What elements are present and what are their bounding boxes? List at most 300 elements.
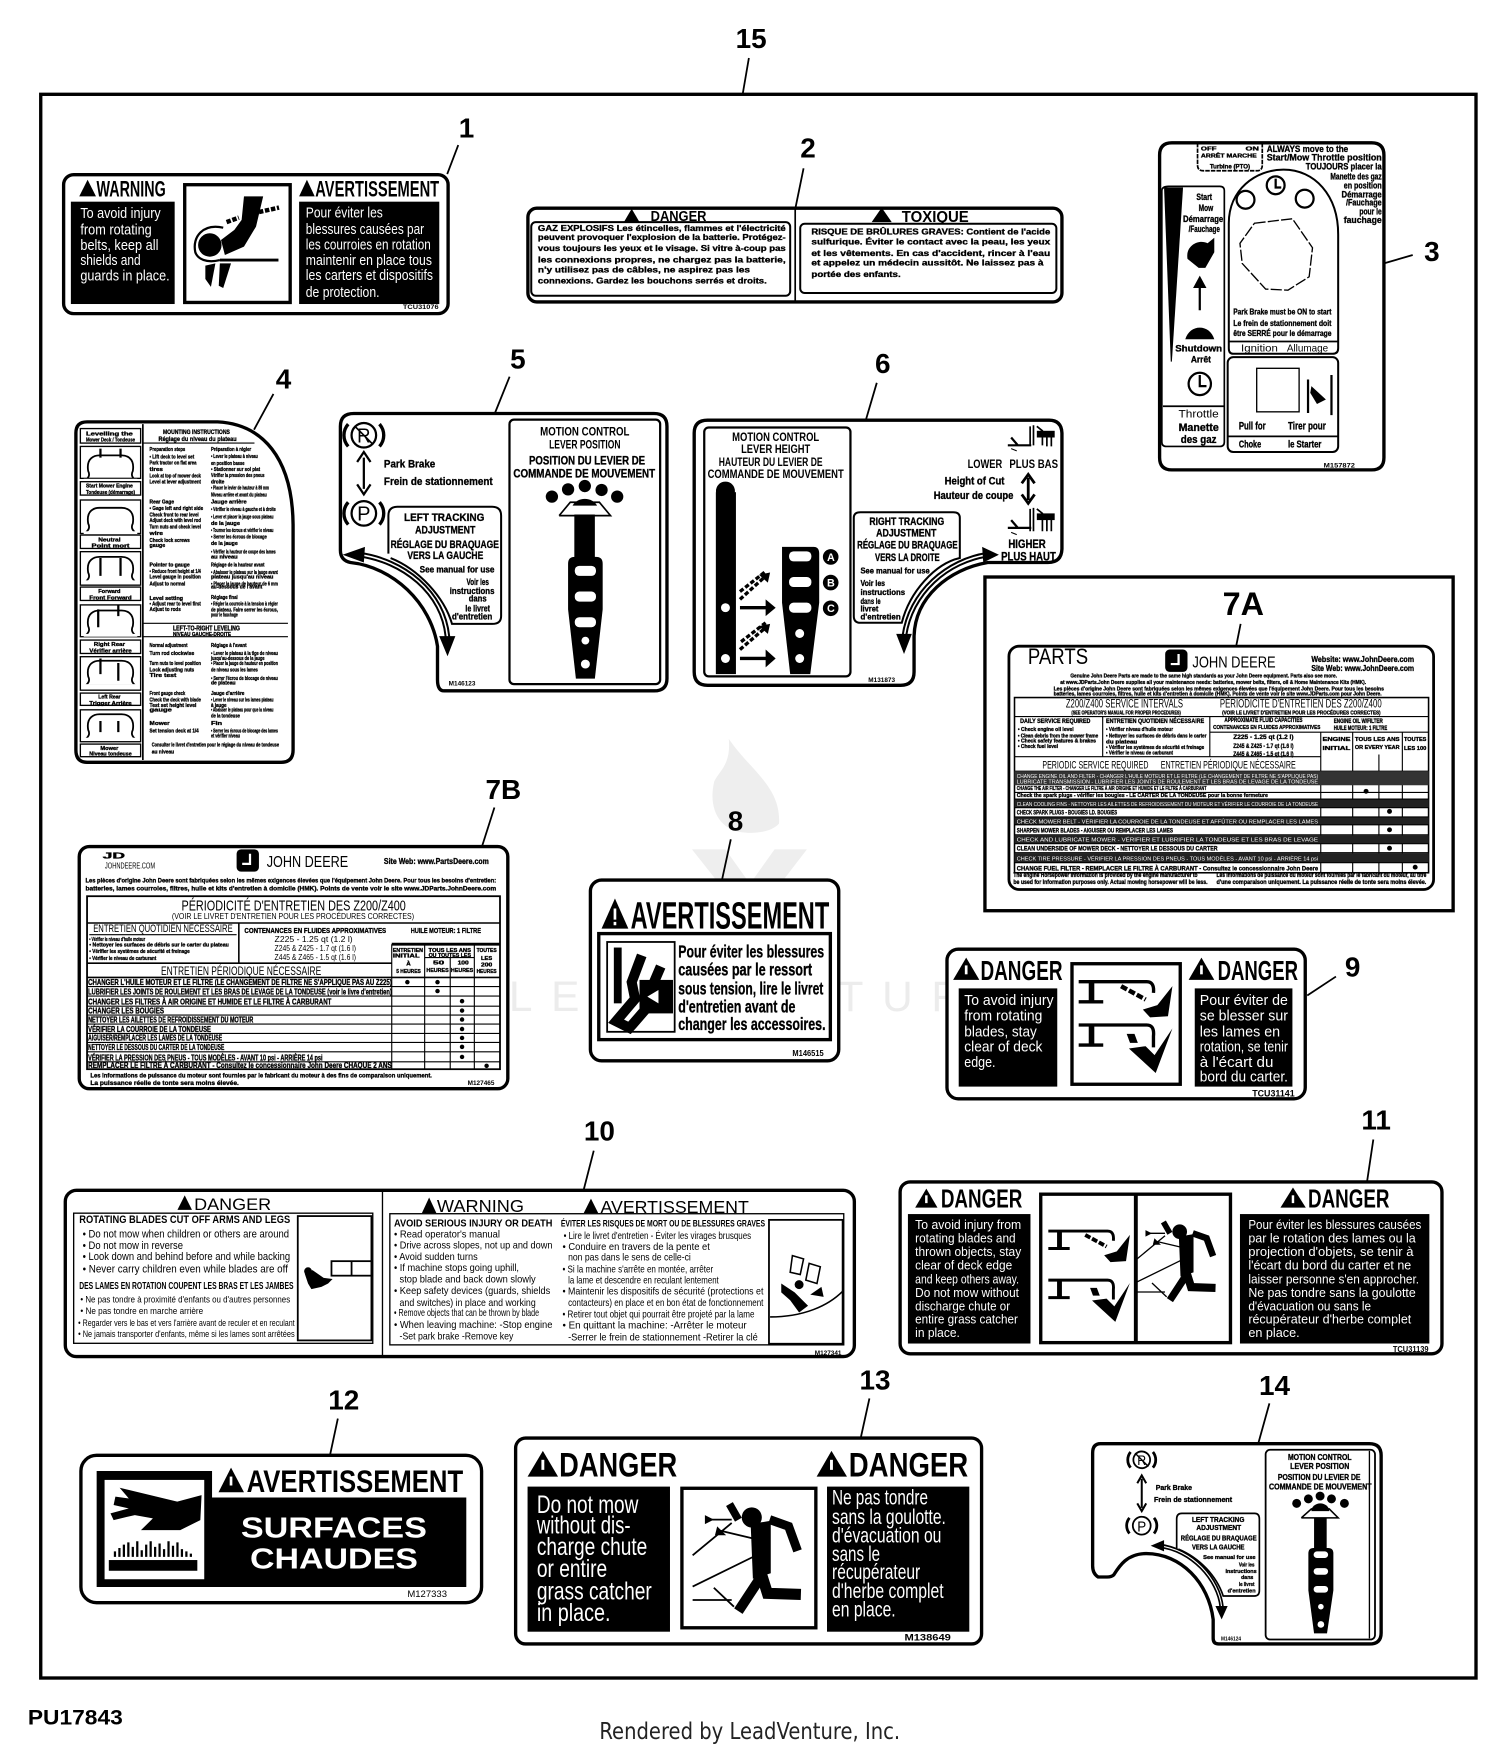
text block: English: in place. <box>915 1325 960 1340</box>
panel: decal 12 hot surfaces <box>81 1455 482 1603</box>
text block: mounting instructions: • Régler la courroie à la tension à régler <box>211 601 278 607</box>
text block: slope warning: contacteurs) en place et en bon état de fonctionnement <box>568 1298 764 1309</box>
text block: slope warning: • Retirer tout objet qui pourrait être projeté par la lame <box>562 1310 755 1321</box>
arrow: right tracking <box>896 547 999 654</box>
icon: park brake R <box>344 423 384 448</box>
heading: AVERTISSEMENT: AVERTISSEMENT <box>315 176 439 201</box>
text block: slope warning: la lame et descendre en reculant lentement <box>568 1275 719 1286</box>
panel: decal 13 discharge chute danger <box>516 1438 982 1644</box>
text block: mounting instructions: Check the deck with blade <box>150 697 201 703</box>
service table: ENGINE OIL W/FILTER <box>1334 718 1383 725</box>
text block: throttle instruction: en position <box>1344 181 1382 192</box>
text block: throttle instruction: Start/Mow Throttle position <box>1267 153 1382 164</box>
footer: rendered by credit: Rendered by LeadVenture, Inc. <box>599 1717 900 1745</box>
text: park brake: Park Brake <box>1156 1483 1192 1492</box>
service rows: CLEAN UNDERSIDE OF MOWER DECK - NETTOYER LE DESSOUS DU CARTER <box>1017 845 1218 852</box>
ignition panel: Allumage <box>1287 344 1329 355</box>
callout number 5 <box>495 343 526 414</box>
text block: mounting instructions: Adjust deck with level rod <box>150 518 201 524</box>
text block: mounting instructions: • Serrer l'écrou de blocage de niveau <box>211 676 278 682</box>
text block: blades warning: • Ne pas tondre à proximité d'enfants ou d'autres personnes <box>80 1294 290 1305</box>
table: 5 HEURES <box>396 969 421 975</box>
tracking box: RÉGLAGE DU BRAQUAGE <box>1181 1534 1257 1543</box>
service table: • Clean debris from the mower frame <box>1018 734 1098 740</box>
service rows: CHANGER LES FILTRES À AIR ORIGINE ET HUMIDE ET LE FILTRE À CARBURANT <box>88 996 332 1006</box>
icon: hand in belt <box>185 185 290 302</box>
text block: French: en place. <box>1248 1325 1300 1340</box>
text block: English: thrown objects, stay <box>915 1244 1022 1259</box>
service table: PERIODIC SERVICE REQUIRED <box>1042 759 1149 771</box>
panel: decal 4 mower deck instructions <box>76 422 293 762</box>
text block: mounting instructions: • Serrer les écrous de blocage des lames <box>211 729 278 735</box>
text block: French: sans le <box>832 1543 880 1566</box>
text block: mounting instructions: Réglage final <box>211 595 238 601</box>
service table: • Vérifier niveau d'huile moteur <box>1106 727 1173 733</box>
tracking adjustment box: ADJUSTMENT <box>876 527 937 539</box>
icon: park brake R <box>1128 1451 1156 1468</box>
text block: slope warning: -Set park brake -Remove key <box>400 1331 513 1342</box>
heading: DANGER French <box>817 1447 968 1485</box>
text block: mounting instructions: gauge <box>150 543 165 549</box>
table: À <box>406 960 411 967</box>
icon: child and mower <box>304 1261 372 1289</box>
ignition panel: Ignition <box>1241 344 1278 355</box>
text block: English: Do not mow without <box>915 1285 1019 1300</box>
icon: higher height mower <box>1008 508 1055 535</box>
ignition panel: Le frein de stationnement doit <box>1233 318 1332 328</box>
heading: DANGER French: DANGER <box>1308 1186 1390 1214</box>
tracking adjustment box: livret <box>860 604 879 614</box>
service table: Z245 & Z425 - 1.7 qt (1.6 l) <box>1233 743 1294 750</box>
service table: INITIAL <box>1323 746 1351 752</box>
text block: French: en place. <box>832 1599 896 1622</box>
text block: blades warning: DES LAMES EN ROTATION COUPENT LES BRAS ET LES JAMBES <box>79 1281 294 1292</box>
tracking box: instructions <box>1225 1569 1257 1575</box>
text block: mounting instructions: • Lever le plateau à la tige de niveau <box>211 651 278 657</box>
website text: Website: www.JohnDeere.com <box>1311 654 1414 664</box>
text block: French warning: les carters et dispositifs <box>306 268 433 284</box>
text block: English: blades, stay <box>964 1024 1038 1040</box>
text block: blades warning: • Do not mow in reverse <box>83 1240 183 1252</box>
tracking box: VERS LA GAUCHE <box>1192 1545 1245 1552</box>
text: height of cut: HIGHER <box>1008 538 1046 551</box>
text block: mounting instructions: • Serrer les écrous de blocage <box>211 535 267 541</box>
service table: ENTRETIEN PÉRIODIQUE NÉCESSAIRE <box>1161 758 1296 771</box>
text block: English: rotating blades and <box>915 1231 1016 1246</box>
text block: English <box>528 1487 670 1632</box>
callout number 3: 3 <box>1424 236 1440 267</box>
text block: intro: Les pièces d'origine John Deere sont fabriquées selon les mêmes exigences élevées que l'équipement John Deere. Pour tous les besoins <box>1054 686 1384 692</box>
text block: English: from rotating <box>964 1009 1042 1025</box>
text block: mounting instructions: Réglage du niveau du plateau <box>158 436 237 443</box>
text block: French battery gas warning: n'y utilisez pas de câbles, ne aspirez pas les <box>538 264 750 274</box>
arrow: park brake <box>357 452 371 494</box>
service table: • Check engine oil level <box>1018 727 1074 733</box>
callout number 7A: 7A <box>1223 586 1264 622</box>
logo: John Deere: JOHN DEERE <box>1192 654 1276 671</box>
service rows: CHANGE FUEL FILTER - REMPLACER LE FILTRE À CARBURANT - Consultez le concessionnaire John Deere <box>1017 864 1318 873</box>
text block: English: charge chute <box>537 1534 647 1561</box>
text block: mounting instructions: • Reduce front height at 1/4 <box>150 569 202 575</box>
text block: mounting instructions: NIVEAU GAUCHE-DROITE <box>173 632 231 638</box>
service rows: NETTOYER LE DESSOUS DU CARTER DE LA TONDEUSE <box>88 1042 225 1052</box>
text block: French warning: maintenir en place tous <box>306 253 432 269</box>
text block: mounting instructions: Vérifier la pression des pneus <box>211 473 265 479</box>
part code: M146515 <box>792 1049 824 1058</box>
text block: slope warning: • Read operator's manual <box>394 1230 500 1241</box>
service table: • Vérifier le niveau de carburant <box>1106 750 1173 756</box>
tracking box: dans <box>1241 1575 1253 1581</box>
text block: French: se blesser sur <box>1200 1009 1288 1025</box>
panel: decal 1 belts warning <box>64 175 448 314</box>
tracking adjustment box: d'entretien <box>860 611 901 621</box>
text block: English warning: shields and <box>80 253 141 269</box>
text block: French: sans la goulotte. <box>832 1506 946 1529</box>
callout number 9: 9 <box>1345 952 1360 983</box>
text block: mounting instructions: • Lever le niveau sur les lames plateau <box>211 697 274 703</box>
text: height of cut <box>934 458 1058 563</box>
text block: mounting instructions <box>143 429 288 755</box>
icon: rotating blades <box>1072 964 1180 1084</box>
text block: mounting instructions: Rear Gage <box>150 499 174 505</box>
icon: runner with thrown objects <box>682 1488 816 1628</box>
service rows: CHANGE THE AIR FILTER - CHANGER LE FILTRE À AIR ORIGINE ET HUMIDE ET LE FILTRE À CARBURANT <box>1017 785 1207 792</box>
service table: du plateau <box>1106 739 1137 745</box>
part code: M138649 <box>904 1633 951 1644</box>
service rows: CHECK AND LUBRICATE MOWER - VÉRIFIER ET LUBRIFIER LA TONDEUSE ET LES BRAS DE LEVAGE <box>1017 837 1318 844</box>
text block: mounting instructions: et vérifier niveau <box>211 734 240 740</box>
watermark: LEADVENTURE <box>509 973 1009 1020</box>
text block: English: To avoid injury <box>964 993 1054 1009</box>
service table: • Vérifier les systèmes de sécurité et freinage <box>1106 745 1204 751</box>
text block: mounting instructions: • Lever et placer la jauge sous plateau <box>211 514 274 520</box>
text block: French: récupérateur d'herbe complet <box>1248 1312 1412 1327</box>
text block: mounting instructions: Check front to rear level <box>150 513 199 519</box>
lever height box: B <box>827 577 835 589</box>
heading: TOXIQUE: TOXIQUE <box>902 209 969 226</box>
text block: French: par le rotation des lames ou la <box>1248 1231 1417 1246</box>
callout number 14 <box>1258 1370 1291 1443</box>
service rows: Check the spark plugs - vérifier les bougies - LE CARTER DE LA TONDEUSE pour la bonne fermeture <box>1017 793 1268 799</box>
text block: throttle instruction: TOUJOURS placer la <box>1306 162 1382 173</box>
service rows: VÉRIFIER LA COURROIE DE LA TONDEUSE <box>88 1024 211 1034</box>
callout number 5: 5 <box>510 343 526 374</box>
tracking adjustment box: instructions <box>450 586 494 596</box>
lever height box <box>704 427 850 676</box>
choke panel: Choke <box>1239 440 1261 451</box>
text block: slope warning <box>390 1214 844 1345</box>
text block: mounting instructions: • Placer le levier de hauteur à 89 mm <box>211 485 269 491</box>
panel: decal 3 throttle and ignition <box>1160 143 1384 470</box>
icon: park brake R: R <box>357 426 371 448</box>
callout number 15: 15 <box>736 23 767 54</box>
table: LES <box>481 956 493 962</box>
heading: DANGER <box>915 1186 1022 1214</box>
text block: French acid warning: sulfurique. Éviter le contact avec la peau, les yeux <box>811 236 1051 246</box>
text block: mounting instructions: LEFT-TO-RIGHT LEVELING <box>173 624 240 633</box>
table: OU TOUTES LES <box>429 953 471 959</box>
lever height box: COMMANDE DE MOUVEMENT <box>708 468 844 481</box>
service table <box>1015 698 1429 873</box>
text block: mounting instructions: • Lever le plateau à niveau <box>211 454 258 460</box>
text block: throttle instruction: pour le <box>1359 206 1382 217</box>
table: HEURES <box>426 968 449 974</box>
text block: mounting instructions: • Abaisser le plateau pour que la niveau <box>211 707 274 713</box>
icon: hand over hot surface <box>105 1480 204 1579</box>
text block: mounting instructions: plateau jusqu'au niveau <box>211 575 274 581</box>
heading: WARNING <box>79 176 166 201</box>
text block: slope warning: • En quittant la machine: -Arrêter le moteur <box>562 1321 747 1332</box>
text block: footnote: be used for information purposes only. Actual mowing horsepower will be less. <box>1013 879 1208 886</box>
panel: decal 8 spring warning <box>590 880 839 1061</box>
logo: parts <box>103 851 155 870</box>
tracking box: Voir les <box>1239 1562 1254 1568</box>
tracking adjustment box: dans le <box>860 596 881 606</box>
service rows: CHECK SPARK PLUGS - BOUGIES LD. BOUGIES <box>1017 810 1118 817</box>
table: ENTRETIEN PÉRIODIQUE NÉCESSAIRE <box>161 963 321 978</box>
text block: French: récupérateur <box>832 1561 920 1584</box>
text block: English: clear of deck <box>964 1039 1043 1055</box>
text block: French acid warning <box>800 224 1056 293</box>
tracking adjustment box: dans <box>469 594 487 604</box>
text block: slope warning: ÉVITER LES RISQUES DE MORT OU DE BLESSURES GRAVES <box>561 1219 765 1230</box>
callout number 11: 11 <box>1361 1104 1391 1135</box>
callout number 7A <box>1223 586 1264 646</box>
text: height of cut: Height of Cut <box>945 475 1005 487</box>
text block: French: Ne pas tondre <box>832 1486 928 1509</box>
heading: AVERTISSEMENT <box>299 176 439 201</box>
PTO box <box>1198 143 1262 171</box>
text block: slope warning: • Maintenir les dispositifs de sécurité (protections et <box>562 1287 764 1298</box>
text block: mounting instructions: • Vérifier la hauteur de coupe des lames <box>211 550 276 556</box>
table: 200 <box>481 963 492 969</box>
text block: mounting instructions: Tire test <box>150 673 177 679</box>
text block: mounting instructions: • Stationner sur sol plat <box>211 467 260 473</box>
text block: French warning: de protection. <box>306 285 379 301</box>
text block: warning: Pour éviter les blessures <box>678 942 824 962</box>
text block: French: Pour éviter de <box>1200 993 1288 1009</box>
service table: • Check safety features & brakes <box>1018 739 1096 745</box>
text block: English <box>908 1214 1030 1344</box>
tracking box <box>1177 1513 1259 1596</box>
logo: parts: PARTS <box>1028 644 1088 669</box>
deck diagrams column: Neutral <box>98 537 121 543</box>
text block: mounting instructions: de niveau sous les lames <box>211 667 258 673</box>
text block: blades warning: • Do not mow when children or others are around <box>83 1229 289 1241</box>
table: HEURES <box>451 968 474 974</box>
text block: slope warning: stop blade and back down slowly <box>400 1274 536 1285</box>
service table: PÉRIODICITÉ D'ENTRETIEN DES Z200/Z400 <box>1220 698 1382 711</box>
tracking adjustment box: LEFT TRACKING <box>404 512 484 524</box>
text block: footnote: d'une comparaison uniquement. La puissance réelle de tonte sera moins élevée. <box>1217 879 1427 886</box>
arrow: height of cut <box>1022 474 1035 503</box>
text block: mounting instructions: Turn nuts to level position <box>150 661 201 667</box>
text block: mounting instructions: Réglage à l'avant <box>211 643 247 649</box>
panel: decal 7B French service interval <box>79 847 508 1089</box>
tracking box: d'entretien <box>1228 1589 1256 1595</box>
service rows: CHANGE ENGINE OIL AND FILTER - CHANGER L'HUILE MOTEUR ET LE FILTRE (LE CHANGEMENT DE FILTRE NE S'APPLIQUE PAS) <box>1017 774 1318 780</box>
part code: M157872 <box>1324 463 1355 470</box>
text block: mounting instructions: gauge <box>150 707 172 713</box>
text block: mounting instructions: Normal adjustment <box>150 643 188 649</box>
tracking adjustment box <box>388 507 501 624</box>
service table: DAILY SERVICE REQUIRED <box>1020 718 1091 725</box>
service rows: CHANGER L'HUILE MOTEUR ET LE FILTRE (LE CHANGEMENT DE FILTRE NE S'APPLIQUE PAS AU Z225) <box>88 977 392 987</box>
table: 50 <box>433 960 444 966</box>
choke panel: le Starter <box>1288 440 1321 451</box>
tracking adjustment box: See manual for use <box>420 565 494 575</box>
text block: mounting instructions: Turn rod clockwise <box>150 651 194 657</box>
heading: DANGER <box>953 955 1062 986</box>
table: ENTRETIEN QUOTIDIEN NÉCESSAIRE <box>93 922 233 935</box>
text block: blades warning: • Ne pas tondre en marche arrière <box>80 1306 203 1317</box>
callout number 4 <box>254 363 292 430</box>
website: Site Web: www.PartsDeere.com <box>384 856 489 866</box>
service table: LES 100 <box>1404 746 1426 752</box>
service rows: AIGUISER/REMPLACER LES LAMES DE LA TONDEUSE <box>88 1033 222 1043</box>
text block: French: l'écart du bord du carter et ne <box>1248 1258 1411 1273</box>
text block: mounting instructions: au-dessous de l'avant <box>211 585 262 591</box>
lever height box: C <box>827 603 835 615</box>
text block: English: entire grass catcher <box>915 1312 1019 1327</box>
icon: park brake P <box>344 501 384 526</box>
text block: slope warning: -Serrer le frein de stationnement -Retirer la clé <box>568 1332 758 1343</box>
heading: DANGER: DANGER <box>980 955 1062 986</box>
figure code: PU17843 <box>28 1706 123 1729</box>
service table: HUILE MOTEUR: 1 FILTRE <box>1334 725 1387 732</box>
service rows: CLEAN COOLING FINS - NETTOYER LES AILETTES DE REFROIDISSEMENT DU MOTEUR ET VÉRIFIER LE COURROIE DE LA TONDEUSE <box>1017 801 1318 808</box>
service table: • Nettoyer les surfaces de débris dans le carter <box>1106 734 1206 740</box>
heading: DANGER: DANGER <box>651 209 707 225</box>
callout number 10: 10 <box>584 1116 615 1147</box>
heading: DANGER French: DANGER <box>1218 955 1298 986</box>
text block: slope warning: • Conduire en travers de la pente et <box>562 1242 710 1253</box>
lever position box: LEVER POSITION <box>1290 1461 1349 1471</box>
table: HEURES <box>477 969 497 975</box>
text block: blades warning: • Regarder vers le bas et vers l'arrière avant de reculer et en reculant <box>78 1318 295 1329</box>
panel: decal 10 rollover and blades <box>65 1190 854 1357</box>
deck diagrams column: Point mort <box>92 543 130 549</box>
text block: mounting instructions: • Vérifier le niveau à gauche et à droite <box>211 507 276 513</box>
text block: French battery gas warning: les connexions propres, ne chargez pas la batterie, <box>538 254 786 264</box>
panel: decal 5 motion control position <box>340 414 667 691</box>
part code: M131873 <box>868 677 895 684</box>
text block: French battery gas warning: connexions. Gardez les bouchons serrés et droits. <box>538 275 767 285</box>
ignition panel: Park Brake must be ON to start <box>1233 307 1332 317</box>
lever height box: MOTION CONTROL <box>732 431 819 444</box>
callout number 4: 4 <box>276 363 292 394</box>
deck diagrams column: Start Mower Engine <box>86 484 133 490</box>
text block: slope warning: • Avoid sudden turns <box>394 1252 478 1263</box>
service table: ENTRETIEN QUOTIDIEN NÉCESSAIRE <box>1106 716 1205 725</box>
text block: mounting instructions: droite <box>211 479 224 485</box>
service rows: CHANGER LES BOUGIES <box>88 1005 164 1015</box>
text: height of cut: PLUS HAUT <box>1001 550 1056 563</box>
logo: parts: JD <box>103 851 126 860</box>
callout number 8 <box>722 805 743 879</box>
text block: French battery gas warning: peuvent provoquer l'explosion de la batterie. Protégez- <box>538 232 786 242</box>
callout number 12 <box>328 1385 359 1455</box>
callout number 13 <box>859 1365 891 1438</box>
lever position box <box>509 420 660 684</box>
text block: French: projection d'objets, se tenir à <box>1248 1244 1414 1259</box>
panel: decal 14 motion control position small <box>1093 1444 1381 1644</box>
text block: intro: at www.JDParts.John Deere supplies all your maintenance needs: batteries, mower belts, filters, oil & Home Maintenance Kits (HMK). <box>1060 680 1366 686</box>
text block: mounting instructions: • Placer la jauge de hauteur de 6 mm <box>211 581 278 587</box>
text block: mounting instructions: Jauge arrière <box>211 499 247 505</box>
PTO box: Turbine (PTO) <box>1210 164 1250 171</box>
deck diagrams column: Forward <box>98 589 121 595</box>
text block: mounting instructions: Front gauge check <box>150 691 186 697</box>
text block: mounting instructions: de plateau. Faire serrer les écrous, <box>211 608 278 614</box>
text block: footnote <box>1013 872 1427 886</box>
part code: TCU31139 <box>1393 1344 1429 1354</box>
text block: throttle instruction: ALWAYS move to the <box>1267 144 1348 155</box>
panel: 7A framed service interval decal <box>985 577 1453 911</box>
text block: footnote: Les informations de puissance du moteur sont fournies par le fabricant du moteur à des fins de comparaison uniquement. <box>90 1073 432 1080</box>
text block: intro: batteries, lames courroies, filtres, huile et kits d'entretien à domicile (HMK). Points de vente voir le site www.JDParts.JohnDeere.com <box>85 886 496 893</box>
panel: decal 2 battery danger <box>528 208 1062 302</box>
callout number 1 <box>447 112 474 174</box>
tracking adjustment box: le livret <box>465 604 490 614</box>
text block: English: Do not mow <box>537 1492 639 1519</box>
table: TOUS LES ANS <box>429 948 471 954</box>
text block: intro: batteries, lames courroies, filtres, huile et kits d'entretien à domicile (HMK). Points de vente voir le site www.JDParts.com pour John Deere. <box>1054 691 1382 697</box>
black backing with hot surface text: CHAUDES <box>250 1544 418 1576</box>
text block: French: d'herbe complet <box>832 1580 944 1603</box>
callout number 3 <box>1384 236 1440 267</box>
text block: French: bord du carter. <box>1200 1069 1288 1085</box>
text block: mounting instructions: Level gauge in position <box>150 575 201 581</box>
deck diagrams column: Front Forward <box>89 595 132 601</box>
service rows: SHARPEN MOWER BLADES - AIGUISER OU REMPLACER LES LAMES <box>1017 828 1173 835</box>
text block: intro <box>1054 673 1384 697</box>
text block: intro: Genuine John Deere Parts are made to the same high standards as your John Deere equipment. Parts also see more. <box>1070 673 1337 679</box>
text block: French battery gas warning <box>531 222 790 296</box>
text block: French warning: les courroies en rotation <box>306 237 431 253</box>
choke panel <box>1228 357 1338 452</box>
callout number 7B: 7B <box>486 774 521 805</box>
callout number 11 <box>1361 1104 1391 1181</box>
tracking adjustment box: RÉGLAGE DU BRAQUAGE <box>857 539 958 552</box>
arrow: park brake <box>1137 1475 1146 1511</box>
heading: AVERTISSEMENT: AVERTISSEMENT <box>631 896 829 938</box>
text block: English: or entire <box>537 1556 607 1583</box>
service table: ENGINE <box>1323 737 1351 743</box>
tracking box: See manual for use <box>1203 1555 1256 1561</box>
lever position box: MOTION CONTROL <box>540 424 630 438</box>
deck diagrams column: Left Rear <box>98 695 121 701</box>
table: Z245 & Z425 - 1.7 qt (1.6 l) <box>275 943 356 953</box>
text block: English warning: To avoid injury <box>80 206 161 222</box>
service rows: CHECK TIRE PRESSURE - VÉRIFIER LA PRESSION DES PNEUS - TOUS MODÈLES - AVANT 10 psi - ARRIÈRE 14 psi <box>1017 855 1318 862</box>
throttle strip <box>1162 186 1224 446</box>
text: height of cut: Hauteur de coupe <box>934 490 1013 502</box>
text block: slope warning: • Remove objects that can be thrown by blade <box>394 1308 539 1319</box>
text block: mounting instructions: Level setting <box>150 596 184 602</box>
text block: footnote: Les informations de puissance du moteur sont fournies par le fabricant du moteur, au titre <box>1217 872 1427 879</box>
table: • Vérifier le niveau de carburant <box>89 956 156 962</box>
service rows <box>87 977 500 1070</box>
text block: mounting instructions: en position basse <box>211 461 244 467</box>
logo: parts: JOHNDEERE.COM <box>105 861 155 870</box>
text block: English warning: belts, keep all <box>80 238 158 254</box>
ignition panel: être SERRÉ pour le démarrage <box>1233 328 1332 338</box>
deck diagrams column: Mower Deck / Tondeuse <box>86 437 135 443</box>
text block: mounting instructions: au niveau <box>211 555 238 561</box>
text: park brake <box>384 459 493 488</box>
throttle strip: Manette <box>1179 422 1219 434</box>
